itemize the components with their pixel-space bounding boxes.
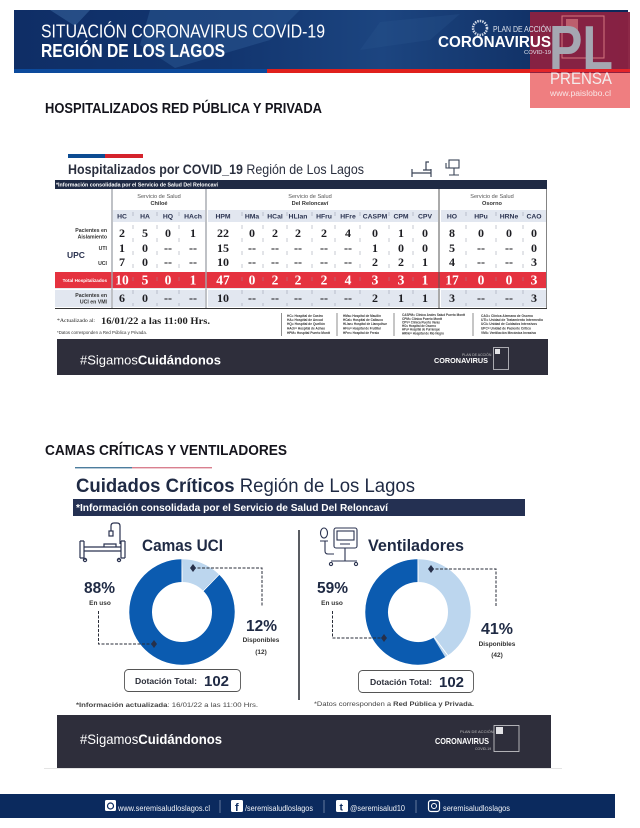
banner: sigamos cuidandonos 2: #SigamosCuidándonos [80, 731, 222, 747]
label: 59% en uso [317, 580, 348, 607]
row: pacientes en aislamiento: 2 [321, 226, 327, 240]
row: pacientes en UCI en VMI: 1 [398, 291, 404, 305]
total box: camas: 102 [204, 673, 229, 690]
row: pacientes en aislamiento: 8 [449, 226, 455, 240]
info bar [55, 180, 547, 189]
row labels: Pacientes en [75, 228, 107, 234]
row: pacientes en UCI en VMI: -- [248, 291, 256, 305]
row labels: UCI [98, 261, 108, 267]
footer: twitter: @seremisalud10 [350, 804, 405, 813]
label: 41% disponibles [479, 621, 516, 659]
abbreviations legend: UCI= Unidad de Cuidados Intensivos [481, 322, 537, 326]
row: pacientes en UCI en VMI: 10 [217, 291, 229, 305]
footer: website [105, 800, 210, 813]
update date note: 16/01/22 a las 11:00 Hrs. [101, 317, 210, 327]
row: total hospitalizados: 5 [142, 272, 149, 288]
label: 41% disponibles: (42) [491, 652, 503, 659]
row: total hospitalizados: 4 [345, 272, 352, 288]
icon: hospital bed [80, 523, 125, 562]
footer: twitter: t [340, 802, 344, 814]
icon: ventilator small [446, 160, 459, 175]
header title line 1: SITUACIÓN CORONAVIRUS COVID-19 [41, 20, 325, 42]
footer: instagram [428, 800, 510, 813]
row: UCI: -- [248, 255, 256, 269]
label: 41% disponibles: Disponibles [479, 641, 516, 648]
row: UCI: -- [294, 255, 302, 269]
watermark url: www.paislobo.cl [549, 89, 611, 98]
donut chart: camas uci [124, 551, 240, 670]
column headers: HO [447, 214, 457, 220]
banner: sigamos cuidandonos 2: PLAN DE ACCIÓN [460, 729, 494, 734]
icon: ventilator [320, 528, 358, 566]
column headers: HFre [340, 214, 356, 220]
callout line: disponibles [428, 565, 496, 606]
row: pacientes en aislamiento: 4 [345, 226, 351, 240]
abbreviations legend: HRNe= Hospital de Río Negro [402, 332, 444, 336]
abbreviations legend: CPM= Clínica Puerto Montt [402, 317, 443, 321]
row: pacientes en aislamiento: 0 [165, 226, 171, 240]
row: total hospitalizados [115, 272, 538, 288]
column headers: HAch [184, 214, 202, 220]
footer: twitter [336, 800, 405, 814]
row: UTI: -- [294, 241, 302, 255]
row: pacientes en aislamiento: 0 [531, 226, 537, 240]
banner: sigamos cuidandonos 1: #SigamosCuidándonos [80, 352, 221, 368]
row: UCI: -- [320, 255, 328, 269]
column headers: CPM [393, 214, 409, 220]
row: pacientes en aislamiento: 0 [478, 226, 484, 240]
row: total hospitalizados: 1 [422, 272, 429, 288]
label: 88% en uso [84, 580, 115, 607]
row: UCI: -- [271, 255, 279, 269]
row: UCI [119, 255, 537, 269]
donut chart: ventiladores [361, 551, 475, 669]
service names: Servicio de Salud [137, 194, 181, 200]
row: UCI: 4 [449, 255, 455, 269]
row: UCI: -- [189, 255, 197, 269]
footnote: informacion actualizada: *Información actualizada : 16/01/22 a las 11:00 Hrs. [76, 702, 258, 709]
column headers: HCal [267, 214, 283, 220]
row: pacientes en UCI en VMI: 3 [531, 291, 537, 305]
abbreviations legend: HA= Hospital de Ancud [287, 318, 323, 322]
row: pacientes en aislamiento: 2 [272, 226, 278, 240]
column headers: HMa [245, 214, 259, 220]
label: 41% disponibles: 41% [481, 621, 513, 638]
abbreviations legend: HAch= Hospital de Achao [287, 326, 325, 330]
row: total hospitalizados: 0 [506, 272, 513, 288]
row: UTI: -- [271, 241, 279, 255]
banner: sigamos cuidandonos 1 [57, 339, 548, 375]
callout line: disponibles [190, 564, 262, 607]
column header bands [113, 210, 546, 222]
abbreviations legend: HPu= Hospital de Purranque [402, 328, 440, 332]
section heading: camas criticas: CAMAS CRÍTICAS Y VENTILADORES [45, 442, 287, 459]
row: UCI: -- [505, 255, 513, 269]
row: pacientes en UCI en VMI: -- [505, 291, 513, 305]
row: UCI: -- [477, 255, 485, 269]
info bar: *Información consolidada por el Servicio de Salud Del Reloncaví [76, 503, 389, 514]
row labels: UPC [67, 250, 85, 260]
abbreviations legend: UTI= Unidad de Tratamiento Intermedio [481, 318, 543, 322]
row: pacientes en UCI en VMI: -- [320, 291, 328, 305]
header title line 2: REGIÓN DE LOS LAGOS [41, 40, 225, 61]
row: pacientes en UCI en VMI: 3 [449, 291, 455, 305]
column headers [117, 214, 542, 220]
row: pacientes en UCI en VMI: 6 [119, 291, 125, 305]
abbreviations legend: HFru= Hospital de Frutillar [343, 326, 382, 330]
row: pacientes en aislamiento: 0 [249, 226, 255, 240]
update date note [57, 317, 210, 335]
footer bar [0, 794, 615, 818]
row: UTI: 0 [142, 241, 148, 255]
row: pacientes en UCI en VMI: 2 [372, 291, 378, 305]
header logo: plan de accion coronavirus: CORONAVIRUS [438, 34, 551, 51]
info bar [73, 499, 525, 516]
column headers: CAO [526, 214, 542, 220]
label: 12% disponibles [243, 618, 280, 656]
row: total hospitalizados: 0 [478, 272, 485, 288]
abbreviations legend: CASPM= Clínica Andes Salud Puerto Montt [402, 313, 466, 317]
row labels: Total Hospitalizados [63, 278, 107, 283]
row: pacientes en UCI en VMI: -- [344, 291, 352, 305]
callout line: en uso [98, 611, 157, 648]
row labels: Pacientes en [75, 293, 107, 299]
row: total hospitalizados: 2 [272, 272, 279, 288]
row: total hospitalizados: 0 [165, 272, 172, 288]
watermark: PL Prensa [530, 12, 630, 108]
row: total hospitalizados: 0 [249, 272, 256, 288]
abbreviations legend: HQ= Hospital de Quellón [287, 322, 325, 326]
footer: facebook: /seremisaludloslagos [245, 804, 313, 813]
row: pacientes en UCI en VMI: 0 [142, 291, 148, 305]
row: pacientes en UCI en VMI: -- [271, 291, 279, 305]
row: UCI: 2 [398, 255, 404, 269]
row: total hospitalizados: 1 [190, 272, 197, 288]
footer: facebook: f [235, 802, 239, 814]
heading: camas uci: Camas UCI [142, 536, 223, 555]
row: UTI: 1 [372, 241, 378, 255]
callout line: en uso [332, 611, 387, 642]
row: UTI: -- [344, 241, 352, 255]
row: UTI: -- [505, 241, 513, 255]
abbreviations legend: HFre= Hospital de Fresia [343, 331, 379, 335]
row: UTI: 5 [449, 241, 455, 255]
label: 59% en uso: En uso [321, 600, 343, 607]
banner: sigamos cuidandonos 2: CORONAVIRUS [435, 736, 489, 746]
column headers: HRNe [500, 214, 518, 220]
row: UTI: -- [320, 241, 328, 255]
row: total hospitalizados: 3 [372, 272, 379, 288]
heading: ventiladores: Ventiladores [368, 536, 464, 555]
abbreviations legend: VMI= Ventilación Mecánica Invasiva [481, 331, 536, 335]
row: UTI: -- [189, 241, 197, 255]
header logo: plan de accion coronavirus [438, 21, 551, 56]
row: pacientes en aislamiento: 0 [372, 226, 378, 240]
row: UTI: 0 [422, 241, 428, 255]
row: UCI: 1 [422, 255, 428, 269]
column headers: CPV [418, 214, 432, 220]
row: total hospitalizados: 2 [321, 272, 328, 288]
info bar: *Información consolidada por el Servicio de Salud Del Reloncaví [56, 182, 219, 188]
row: UCI: -- [164, 255, 172, 269]
column headers: HFru [316, 214, 332, 220]
uci vmi row band [55, 290, 546, 307]
service names [137, 194, 514, 207]
abbreviations legend: HLlan= Hospital de Llanquihue [343, 322, 387, 326]
abbreviations legend: HC= Hospital de Castro [287, 314, 323, 318]
row: UCI: 10 [217, 255, 229, 269]
label: 12% disponibles: 12% [246, 618, 277, 635]
column headers: HQ [163, 214, 173, 220]
row labels: UCI en VMI [80, 300, 108, 306]
label: 59% en uso: 59% [317, 580, 348, 597]
row: pacientes en aislamiento: 22 [217, 226, 229, 240]
row: UTI: 0 [398, 241, 404, 255]
row: pacientes en aislamiento: 2 [119, 226, 125, 240]
update date note: *Actualizado al: [57, 318, 95, 324]
service names: Del Reloncaví [292, 201, 329, 207]
total box: ventiladores: Dotación Total: [370, 677, 432, 687]
row: total hospitalizados: 2 [295, 272, 302, 288]
row: UTI: 15 [217, 241, 229, 255]
footer: facebook [231, 800, 313, 814]
abbreviations legend: UPC= Unidad de Paciente Crítico [481, 326, 531, 330]
header logo: plan de accion coronavirus: COVID-19 [524, 50, 551, 56]
column headers: HA [140, 214, 150, 220]
column headers: HPM [215, 214, 231, 220]
header logo: plan de accion coronavirus: PLAN DE ACCIÓN [493, 25, 551, 34]
column headers: HPu [474, 214, 488, 220]
abbreviations legend: CAO= Clínica Alemana de Osorno [481, 314, 533, 318]
row: total hospitalizados: 47 [216, 272, 230, 288]
panel title: Cuidados Críticos Región de Los Lagos [76, 476, 415, 497]
footer: website: www.seremisaludloslagos.cl [117, 804, 210, 813]
row: pacientes en aislamiento: 1 [398, 226, 404, 240]
abbreviations legend [282, 313, 543, 336]
abbreviations legend: HO= Hospital de Osorno [402, 324, 436, 328]
row: UTI: -- [248, 241, 256, 255]
label: 12% disponibles: Disponibles [243, 637, 280, 644]
banner: sigamos cuidandonos 1: PLAN DE ACCIÓN [462, 352, 492, 357]
row: UTI: 0 [531, 241, 537, 255]
row: pacientes en UCI en VMI: -- [189, 291, 197, 305]
row: UCI: -- [344, 255, 352, 269]
row labels: UTI [99, 246, 108, 252]
row: pacientes en UCI en VMI: -- [294, 291, 302, 305]
column headers: HC [117, 214, 127, 220]
row: pacientes en UCI en VMI: -- [477, 291, 485, 305]
row: pacientes en aislamiento: 2 [295, 226, 301, 240]
total box: camas: Dotación Total: [135, 676, 197, 686]
total row band [55, 272, 546, 288]
service names: Osorno [482, 201, 503, 207]
label: 88% en uso: En uso [89, 600, 111, 607]
row: UTI: -- [164, 241, 172, 255]
row: pacientes en aislamiento: 0 [506, 226, 512, 240]
row labels [63, 228, 108, 306]
row: total hospitalizados: 17 [445, 272, 459, 288]
panel title: Hospitalizados por COVID_19 Región de Los Lagos [68, 162, 364, 177]
column headers: CASPM [363, 214, 388, 220]
row: UTI: -- [477, 241, 485, 255]
section heading: hospitalizados: HOSPITALIZADOS RED PÚBLICA Y PRIVADA [45, 99, 322, 117]
watermark word: PRENSA [550, 69, 613, 88]
abbreviations legend: HMa= Hospital de Maullín [343, 314, 381, 318]
abbreviations legend: HPM= Hospital Puerto Montt [287, 331, 331, 335]
abbreviations legend: HCal= Hospital de Calbuco [343, 318, 383, 322]
label: 88% en uso: 88% [84, 580, 115, 597]
icon: bed small [412, 162, 431, 177]
row: UCI: 0 [142, 255, 148, 269]
row: pacientes en UCI en VMI: -- [164, 291, 172, 305]
header banner [14, 10, 628, 73]
row: UCI: 7 [119, 255, 125, 269]
banner: sigamos cuidandonos 2: COVID-19 [475, 747, 491, 751]
column headers: HLlan [289, 214, 307, 220]
row labels: Aislamiento [78, 234, 107, 240]
update date note: *Datos corresponden a Red Pública y Privada. [57, 330, 147, 335]
row: UCI: 2 [372, 255, 378, 269]
banner: sigamos cuidandonos 2 [44, 715, 562, 769]
row: total hospitalizados: 3 [531, 272, 538, 288]
total box: ventiladores [358, 670, 474, 692]
row: total hospitalizados: 10 [115, 272, 129, 288]
service names: Servicio de Salud [288, 194, 332, 200]
total box: ventiladores: 102 [439, 674, 464, 691]
row: pacientes en aislamiento: 1 [190, 226, 196, 240]
row: pacientes en UCI en VMI [119, 291, 537, 305]
watermark letters: PL [549, 14, 613, 83]
banner: sigamos cuidandonos 1: CORONAVIRUS [434, 356, 488, 365]
row: pacientes en aislamiento: 5 [142, 226, 148, 240]
label: 12% disponibles: (12) [255, 649, 267, 656]
row: pacientes en aislamiento: 0 [422, 226, 428, 240]
row: pacientes en UCI en VMI: 1 [422, 291, 428, 305]
row: UCI: 3 [531, 255, 537, 269]
total box: camas [124, 670, 240, 692]
service names: Servicio de Salud [470, 194, 514, 200]
footnote: datos: *Datos corresponden a Red Pública y Privada. [314, 701, 474, 708]
abbreviations legend: CPV= Clínica Puerto Varas [402, 320, 440, 324]
service names: Chiloé [150, 201, 168, 207]
footer: instagram: seremisaludloslagos [443, 804, 510, 813]
panel: cuidados criticos [44, 467, 562, 769]
row: pacientes en aislamiento [119, 226, 537, 240]
row: UTI [119, 241, 537, 255]
row: UTI: 1 [119, 241, 125, 255]
row: total hospitalizados: 3 [398, 272, 405, 288]
panel: hospitalizados table [55, 154, 548, 375]
